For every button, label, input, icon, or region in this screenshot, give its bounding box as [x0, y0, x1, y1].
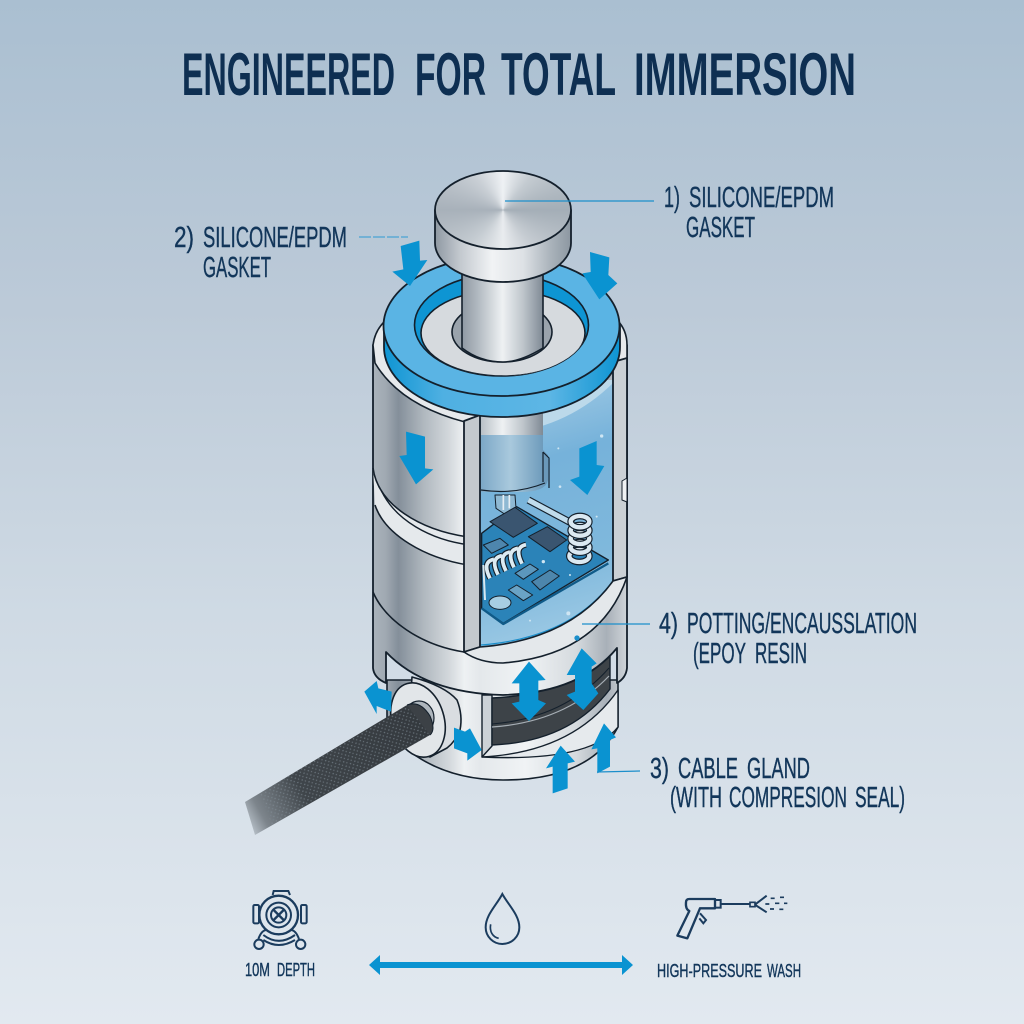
text: high-pressure wash: HIGH-PRESSURE	[657, 961, 762, 981]
leader lines	[359, 201, 654, 772]
text: high-pressure wash: WASH	[767, 961, 801, 981]
label 1	[664, 182, 834, 244]
horizontal coil	[487, 545, 526, 578]
label 2: SILICONE/EPDM	[203, 222, 347, 254]
label 3: CABLE	[678, 753, 738, 785]
shaft	[462, 260, 543, 362]
wire to coil	[528, 500, 573, 524]
label 3: COMPRESION	[729, 782, 847, 814]
label 4: 4)	[659, 608, 678, 640]
base collar	[387, 680, 618, 780]
cap top	[435, 171, 571, 249]
icon: water drop	[486, 894, 519, 944]
inner cup	[421, 290, 585, 376]
arrows: middle	[399, 432, 604, 495]
seal ring	[384, 256, 620, 417]
label 2: GASKET	[203, 252, 271, 284]
title	[182, 41, 856, 108]
cable gland	[382, 676, 461, 764]
microchip large	[490, 507, 537, 537]
cutaway sensor assembly	[245, 171, 627, 835]
text: 10m depth: 10M	[245, 960, 270, 980]
title: FOR	[415, 41, 486, 108]
arrows: lower	[364, 648, 616, 793]
text: 10m depth: DEPTH	[277, 960, 315, 980]
label 1: GASKET	[686, 212, 755, 244]
blue force arrows	[364, 241, 617, 793]
icon: pressure washer	[677, 896, 787, 938]
text: 10m depth	[245, 960, 315, 980]
label 3: 3)	[650, 753, 669, 785]
label 3: (WITH	[670, 782, 722, 814]
window frame walls	[464, 358, 627, 663]
vertical coil	[569, 516, 589, 562]
shaft above resin	[481, 414, 543, 435]
title: ENGINEERED	[182, 41, 395, 108]
title: IMMERSION	[634, 41, 856, 108]
bubbles	[529, 434, 603, 622]
label 1: SILICONE/EPDM	[689, 182, 834, 214]
motor housing in resin	[481, 435, 549, 492]
cable	[245, 704, 433, 835]
main body shell	[373, 345, 627, 695]
label 2	[174, 222, 347, 284]
shaft hole	[452, 302, 552, 362]
cap side	[435, 210, 571, 282]
window bottom highlight	[481, 582, 612, 645]
connector pins	[495, 495, 516, 515]
double arrow	[369, 955, 633, 975]
label 3	[650, 753, 905, 814]
window: potting resin	[480, 380, 613, 650]
label 1: 1)	[664, 182, 680, 214]
top lip of body	[373, 320, 627, 422]
label 4	[659, 608, 917, 670]
icon: diving helmet	[253, 891, 307, 949]
label 4: (EPOY	[693, 638, 746, 670]
resin fill	[480, 383, 613, 650]
label 2: 2)	[174, 222, 194, 254]
label 4: RESIN	[755, 638, 807, 670]
circuit board	[482, 434, 608, 624]
label 3: SEAL)	[855, 782, 905, 814]
compression seal gasket slot	[482, 655, 610, 757]
microchip small	[528, 527, 567, 552]
small components	[483, 538, 508, 553]
body groove	[373, 468, 470, 652]
arrows: top	[392, 241, 617, 299]
label 3: GLAND	[747, 753, 810, 785]
title: TOTAL	[501, 41, 616, 108]
